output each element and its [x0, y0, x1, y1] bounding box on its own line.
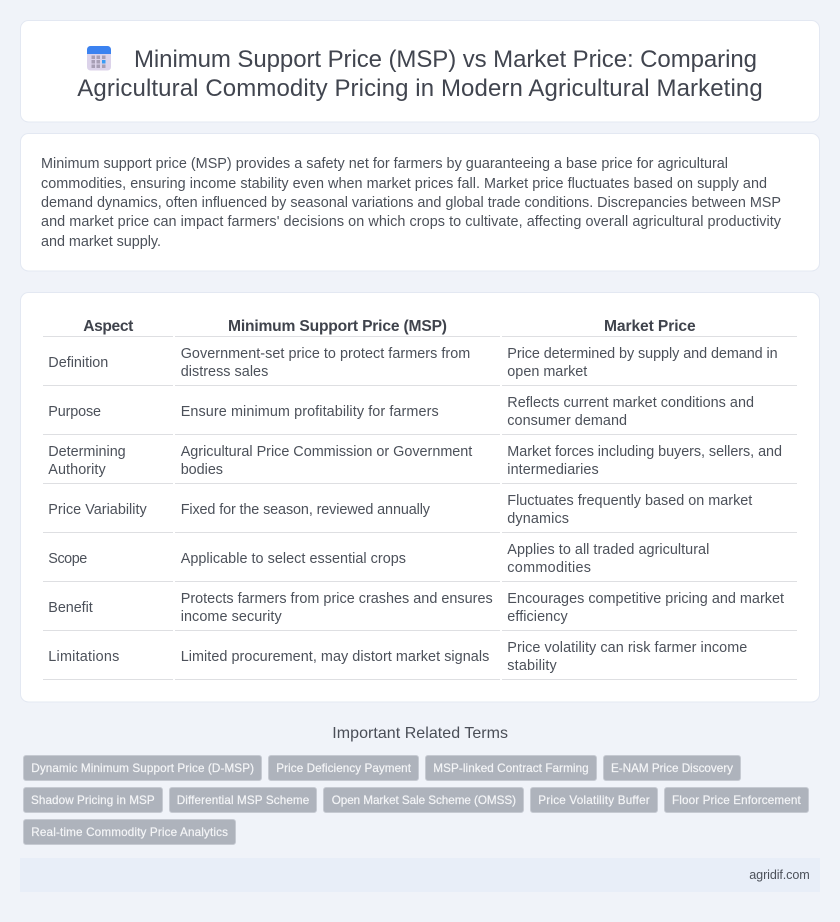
row: definition: distress sales: [181, 364, 268, 380]
related term chips: Real-time Commodity Price Analytics: [31, 826, 228, 839]
row: determining authority: Determining: [48, 444, 126, 460]
heading: important related terms: Important Related Terms: [332, 725, 508, 742]
panel: header: [20, 20, 820, 122]
row: determining authority: Authority: [48, 462, 106, 478]
related term chips: Price Deficiency Payment: [276, 762, 412, 775]
row: price variability: Price Variability: [48, 502, 147, 518]
row: price variability: Fluctuates frequently based on market: [507, 493, 752, 509]
row: benefit: Protects farmers from price crashes and ensures: [181, 591, 493, 607]
related term chips: E-NAM Price Discovery: [611, 762, 733, 775]
row: limitations: Limitations: [48, 649, 119, 665]
related term chips: [24, 756, 808, 844]
row: price variability: dynamics: [507, 511, 569, 527]
row: limitations: [43, 640, 797, 680]
row: benefit: efficiency: [507, 609, 568, 625]
row: purpose: Ensure minimum profitability for farmers: [181, 404, 439, 420]
row: definition: Definition: [48, 355, 108, 371]
row: scope: Applicable to select essential crops: [181, 551, 406, 567]
row: benefit: Benefit: [48, 600, 93, 616]
intro text: [41, 156, 782, 250]
related term chips: Shadow Pricing in MSP: [31, 794, 155, 807]
related term chips: Differential MSP Scheme: [177, 794, 309, 807]
table header: Minimum Support Price (MSP): [228, 318, 447, 335]
row: scope: commodities: [507, 560, 591, 576]
intro text: demand dynamics, often influenced by seasonal variations and global trade conditions. Discrepancies between MSP: [41, 195, 781, 211]
footer: agridif.com: [749, 868, 810, 882]
intro text: commodities, ensuring income stability even when market prices fall. Market price fluctuates based on supply and: [41, 176, 767, 192]
table header: [43, 318, 797, 337]
row: purpose: [43, 395, 797, 435]
row: scope: Scope: [48, 551, 87, 567]
intro text: and market price can impact farmers' decisions on which crops to cultivate, affecting overall agricultural productivity: [41, 214, 782, 230]
related term chips: Price Volatility Buffer: [538, 794, 650, 807]
row: determining authority: Agricultural Price Commission or Government: [181, 444, 472, 460]
panel: comparison table: [20, 292, 820, 702]
row: limitations: stability: [507, 658, 557, 674]
panel: introduction: [20, 134, 820, 271]
row: limitations: Price volatility can risk farmer income: [507, 640, 747, 656]
row: determining authority: intermediaries: [507, 462, 599, 478]
row: purpose: Purpose: [48, 404, 101, 420]
row: definition: [43, 346, 797, 386]
related term chips: Open Market Sale Scheme (OMSS): [332, 794, 516, 807]
related term chips: MSP-linked Contract Farming: [433, 762, 589, 775]
table header: Aspect: [83, 318, 133, 335]
footer: [20, 858, 820, 892]
row: price variability: [43, 493, 797, 533]
row: benefit: Encourages competitive pricing and market: [507, 591, 784, 607]
intro text: and market supply.: [41, 234, 161, 250]
title: [77, 46, 763, 102]
intro text: Minimum support price (MSP) provides a safety net for farmers by guaranteeing a base price for agricultural: [41, 156, 728, 172]
related term chips: Floor Price Enforcement: [672, 794, 801, 807]
row: definition: Price determined by supply and demand in: [507, 346, 778, 362]
related term chips: Dynamic Minimum Support Price (D-MSP): [31, 762, 254, 775]
row: price variability: Fixed for the season, reviewed annually: [181, 502, 431, 518]
icon: calendar: [87, 46, 111, 70]
row: benefit: income security: [181, 609, 282, 625]
title: Agricultural Commodity Pricing in Modern Agricultural Marketing: [77, 75, 763, 102]
row: determining authority: bodies: [181, 462, 223, 478]
row: purpose: Reflects current market conditions and: [507, 395, 754, 411]
row: purpose: consumer demand: [507, 413, 627, 429]
row: determining authority: [43, 444, 797, 484]
row: scope: [43, 542, 797, 582]
title: Minimum Support Price (MSP) vs Market Price: Comparing: [134, 46, 757, 73]
table header: Market Price: [604, 318, 696, 335]
row: definition: Government-set price to protect farmers from: [181, 346, 470, 362]
row: scope: Applies to all traded agricultural: [507, 542, 709, 558]
row: limitations: Limited procurement, may distort market signals: [181, 649, 489, 665]
row: benefit: [43, 591, 797, 631]
row: determining authority: Market forces including buyers, sellers, and: [507, 444, 782, 460]
row: definition: open market: [507, 364, 587, 380]
